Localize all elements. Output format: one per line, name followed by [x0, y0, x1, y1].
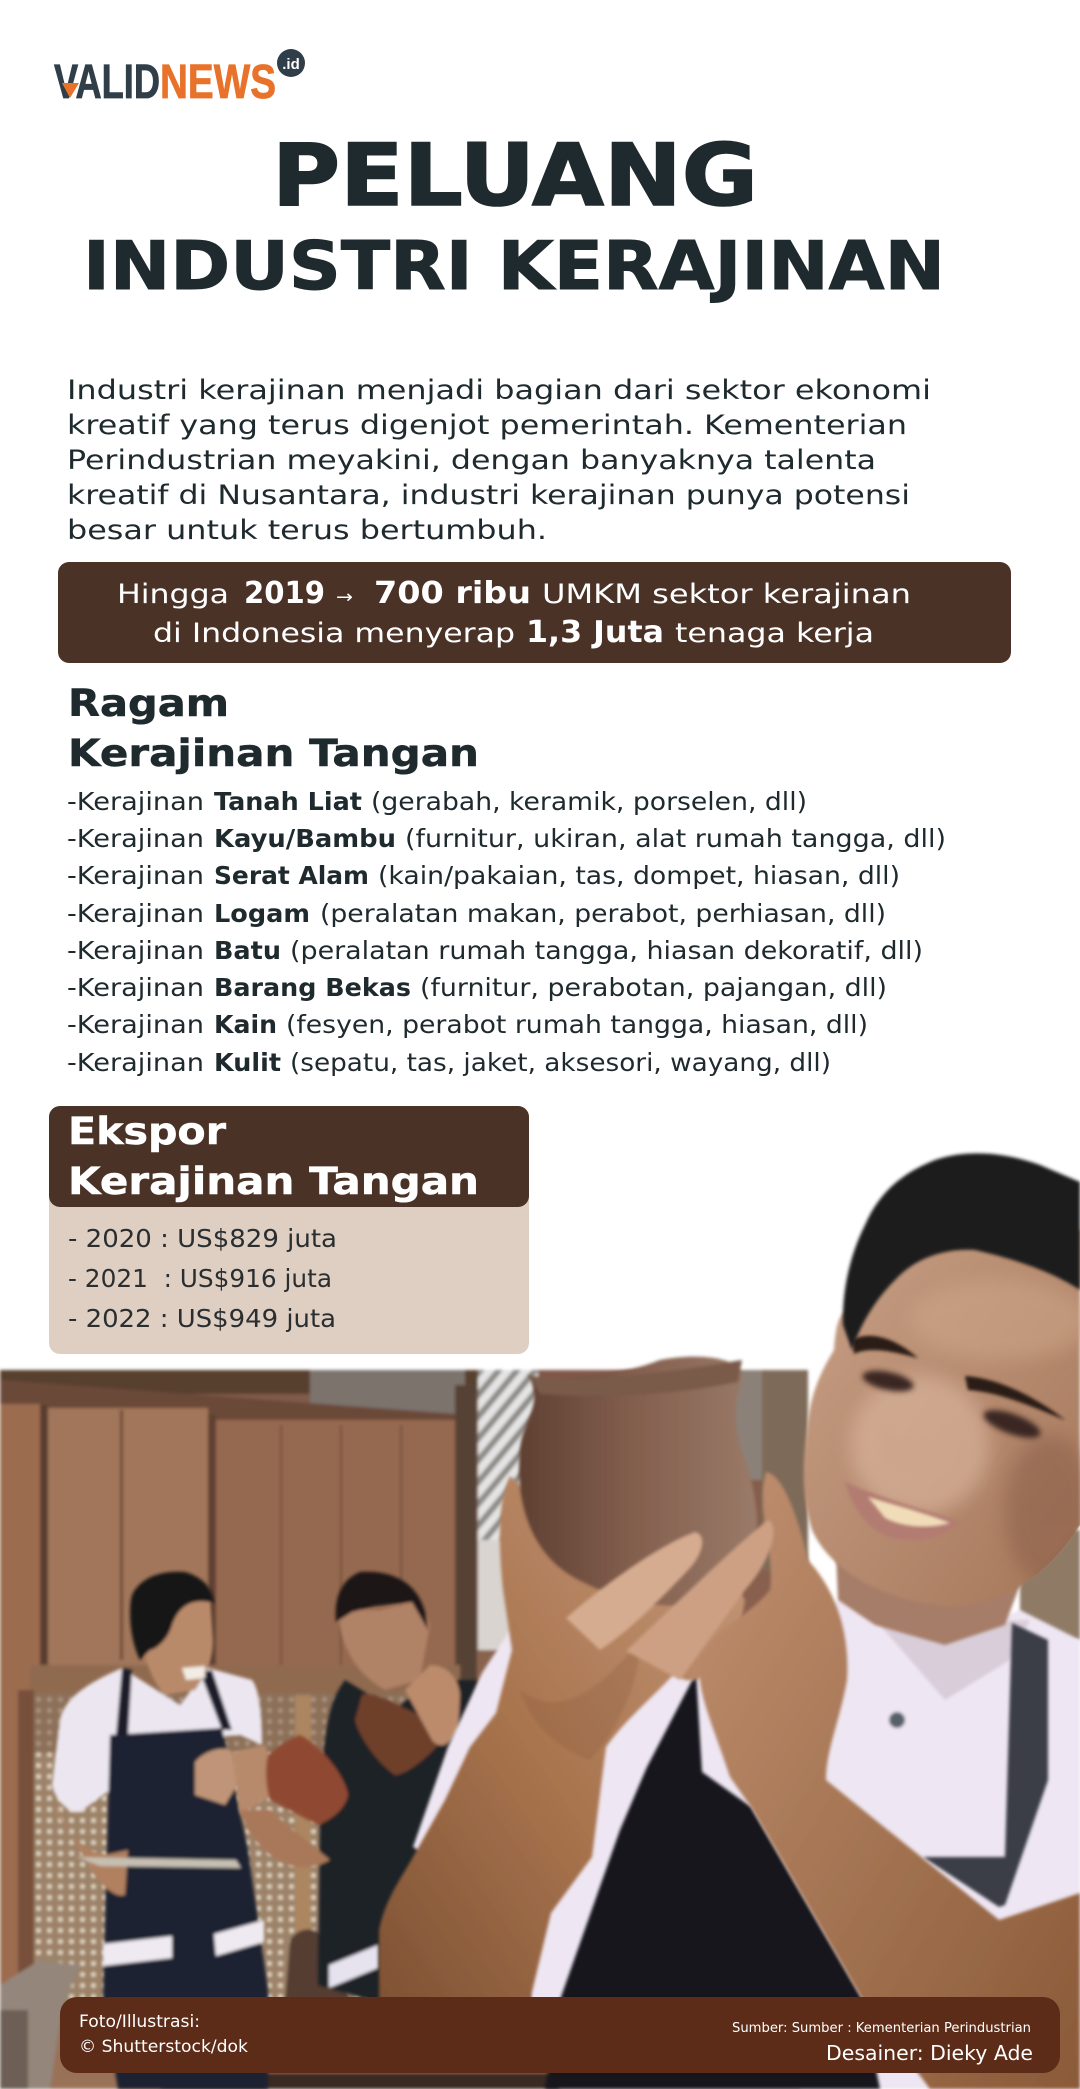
list: types of handicrafts: [67, 787, 946, 1077]
list: types of handicrafts: Serat Alam: [214, 861, 369, 890]
highlight band: UMKM stat: [58, 562, 1011, 663]
intro paragraph: Industri kerajinan menjadi bagian dari sektor ekonomi: [67, 375, 931, 406]
highlight band: UMKM stat: 700 ribu: [374, 576, 531, 611]
list: types of handicrafts: (peralatan rumah tangga, hiasan dekoratif, dll): [290, 936, 923, 965]
small figure: man with clipboard: [52, 1572, 268, 2089]
list: types of handicrafts: (fesyen, perabot rumah tangga, hiasan, dll): [286, 1010, 868, 1039]
panel header: Ekspor Kerajinan Tangan: Kerajinan Tangan: [68, 1160, 479, 1203]
list: types of handicrafts: (kain/pakaian, tas, dompet, hiasan, dll): [378, 861, 900, 890]
photo: craftsmen with clay pots: [0, 1153, 1080, 2089]
big figure: teeth: [868, 1497, 950, 1527]
logo: Validnews.id: NEWS: [160, 56, 276, 109]
heading: Ragam Kerajinan Tangan: Kerajinan Tangan: [68, 732, 479, 775]
big figure: eyes: [861, 1367, 1044, 1444]
list: types of handicrafts: -Kerajinan: [67, 899, 204, 928]
export values by year: - 2022 : US$949 juta: [68, 1304, 336, 1333]
export values by year: - 2021 : US$916 juta: [68, 1264, 332, 1293]
intro paragraph: kreatif yang terus digenjot pemerintah. Kementerian: [67, 410, 907, 441]
title: INDUSTRI KERAJINAN: [83, 227, 945, 305]
title: [83, 126, 945, 305]
big figure: apron: [545, 1623, 1048, 2089]
list: types of handicrafts: -Kerajinan: [67, 1010, 204, 1039]
highlight band: UMKM stat: 2019: [244, 576, 325, 611]
list: types of handicrafts: -Kerajinan: [67, 824, 204, 853]
list: types of handicrafts: Tanah Liat: [214, 787, 362, 816]
list: types of handicrafts: Kain: [214, 1010, 277, 1039]
footer bar: credits: Desainer: Dieky Ade: [826, 2041, 1033, 2065]
list: types of handicrafts: (gerabah, keramik, porselen, dll): [371, 787, 807, 816]
big figure: face: [804, 1230, 1080, 1607]
heading: Ragam Kerajinan Tangan: Ragam: [68, 682, 229, 725]
big figure: right hand and forearm: [699, 1472, 1080, 2089]
list: types of handicrafts: (peralatan makan, perabot, perhiasan, dll): [320, 899, 886, 928]
intro paragraph: kreatif di Nusantara, industri kerajinan punya potensi: [67, 480, 910, 511]
photo background: wooden workshop wall: [0, 1370, 1080, 2089]
list: types of handicrafts: Barang Bekas: [214, 973, 411, 1002]
panel header: Ekspor Kerajinan Tangan: [49, 1106, 529, 1207]
list: types of handicrafts: -Kerajinan: [67, 787, 204, 816]
big figure: eyebrows: [852, 1336, 1065, 1420]
export values by year: - 2020 : US$829 juta: [68, 1224, 337, 1253]
footer bar: credits: Sumber: Sumber : Kementerian Perindustrian: [732, 2021, 1031, 2036]
list: types of handicrafts: (furnitur, perabotan, pajangan, dll): [420, 973, 887, 1002]
footer bar: credits: © Shutterstock/dok: [79, 2037, 248, 2057]
intro paragraph: besar untuk terus bertumbuh.: [67, 515, 547, 546]
highlight band: UMKM stat: tenaga kerja: [675, 618, 874, 649]
big figure: clay pot: [519, 1357, 757, 1606]
highlight band: UMKM stat: →: [336, 587, 353, 608]
list: types of handicrafts: Kayu/Bambu: [214, 824, 396, 853]
panel: export figures: [49, 1106, 529, 1354]
list: types of handicrafts: Batu: [214, 936, 281, 965]
list: types of handicrafts: (furnitur, ukiran, alat rumah tangga, dll): [405, 824, 946, 853]
list: types of handicrafts: -Kerajinan: [67, 936, 204, 965]
footer bar: credits: Foto/Illustrasi:: [79, 2012, 200, 2032]
big figure: fingers on pot: [566, 1520, 773, 1680]
export values by year: [68, 1224, 337, 1333]
heading: Ragam Kerajinan Tangan: [68, 682, 479, 775]
highlight band: UMKM stat: 1,3 Juta: [526, 615, 664, 650]
footer bar: credits: [60, 1997, 1060, 2073]
big figure: mouth: [845, 1482, 960, 1540]
list: types of handicrafts: -Kerajinan: [67, 861, 204, 890]
list: types of handicrafts: (sepatu, tas, jaket, aksesori, wayang, dll): [290, 1048, 831, 1077]
highlight band: UMKM stat: UMKM sektor kerajinan: [542, 579, 911, 610]
list: types of handicrafts: -Kerajinan: [67, 1048, 204, 1077]
logo: Validnews.id: .id: [282, 56, 300, 73]
highlight band: UMKM stat: Hingga: [117, 579, 229, 610]
small figure: man holding pots: [232, 1572, 478, 2000]
list: types of handicrafts: Logam: [214, 899, 310, 928]
logo: Validnews.id: [54, 49, 305, 109]
intro paragraph: Perindustrian meyakini, dengan banyaknya talenta: [67, 445, 876, 476]
panel header: Ekspor Kerajinan Tangan: Ekspor: [68, 1110, 227, 1153]
big figure: shirt: [413, 1600, 1080, 2089]
big figure: left forearm and hand: [379, 1476, 745, 2000]
title: PELUANG: [272, 126, 758, 226]
list: types of handicrafts: Kulit: [214, 1048, 281, 1077]
big figure: neck: [835, 1530, 1030, 1645]
big figure: hair: [843, 1153, 1080, 1350]
logo: Validnews.id: VALID: [54, 56, 160, 109]
list: types of handicrafts: -Kerajinan: [67, 973, 204, 1002]
intro paragraph: [67, 375, 931, 546]
highlight band: UMKM stat: di Indonesia menyerap: [153, 618, 515, 649]
big figure: nose: [880, 1420, 956, 1480]
